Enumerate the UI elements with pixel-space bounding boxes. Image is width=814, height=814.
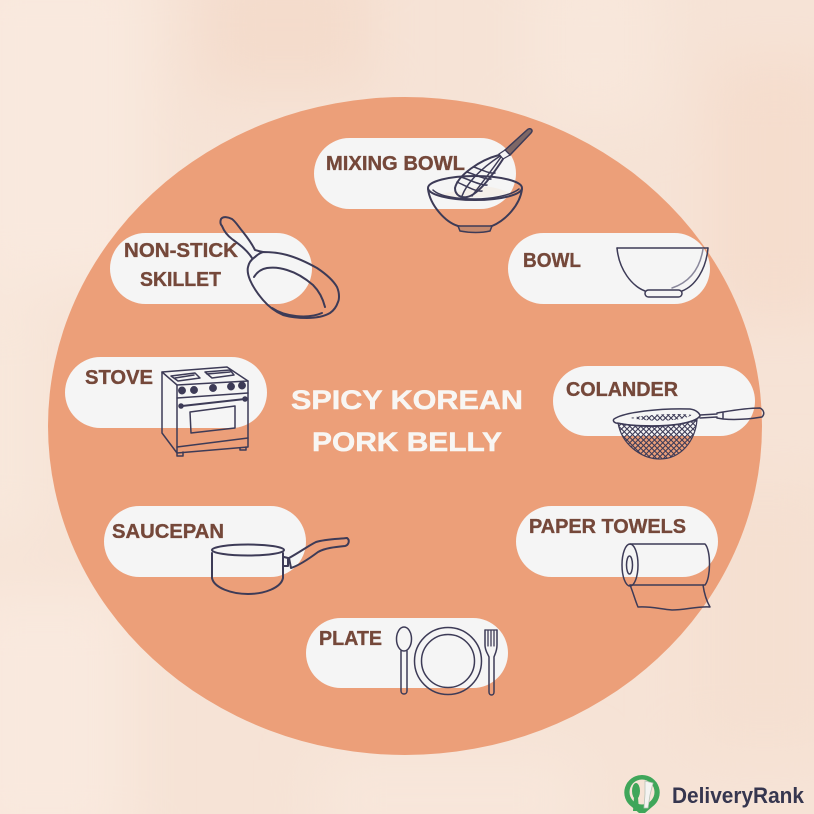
main circle xyxy=(48,97,762,755)
label: non-stick skillet: SKILLET xyxy=(140,269,221,291)
panel: paper towels xyxy=(516,506,718,610)
wordmark: DeliveryRank xyxy=(672,783,805,808)
pill: bowl xyxy=(508,233,710,304)
icon: stove xyxy=(162,367,248,456)
logo: DeliveryRank xyxy=(624,775,805,813)
icon: plate with spoon and fork xyxy=(396,627,497,695)
icon: saucepan xyxy=(212,538,349,594)
icon: paper towels xyxy=(622,544,710,610)
pill: saucepan xyxy=(104,506,306,577)
panel: saucepan xyxy=(104,506,349,594)
panel: non-stick skillet xyxy=(110,217,339,318)
label: paper towels: PAPER TOWELS xyxy=(529,516,686,538)
pill: skillet xyxy=(110,233,312,304)
title: PORK BELLY xyxy=(312,427,502,457)
label: saucepan: SAUCEPAN xyxy=(112,521,224,543)
panel: colander xyxy=(553,366,764,459)
panel: mixing bowl xyxy=(314,129,532,232)
pill: mixing bowl xyxy=(314,138,516,209)
label: mixing bowl: MIXING BOWL xyxy=(326,153,465,175)
icon: colander xyxy=(613,408,764,459)
icon: bowl xyxy=(617,248,708,297)
panel: bowl xyxy=(508,233,710,304)
label: stove: STOVE xyxy=(85,367,153,389)
title xyxy=(291,385,523,457)
pill: colander xyxy=(553,366,755,436)
label: colander: COLANDER xyxy=(566,379,679,401)
icon: skillet xyxy=(220,217,339,318)
pill: stove xyxy=(65,357,267,428)
panel: stove xyxy=(65,357,267,456)
label: bowl: BOWL xyxy=(523,250,581,272)
title: SPICY KOREAN xyxy=(291,385,523,415)
label: non-stick skillet: NON-STICK xyxy=(124,240,239,262)
label: non-stick skillet xyxy=(124,240,239,291)
panel: plate xyxy=(306,618,508,695)
icon: mixing bowl and whisk xyxy=(428,129,532,232)
pill: plate xyxy=(306,618,508,688)
icon: logo fork and spoon xyxy=(624,775,660,813)
label: plate: PLATE xyxy=(319,628,382,650)
pill: paper towels xyxy=(516,506,718,577)
